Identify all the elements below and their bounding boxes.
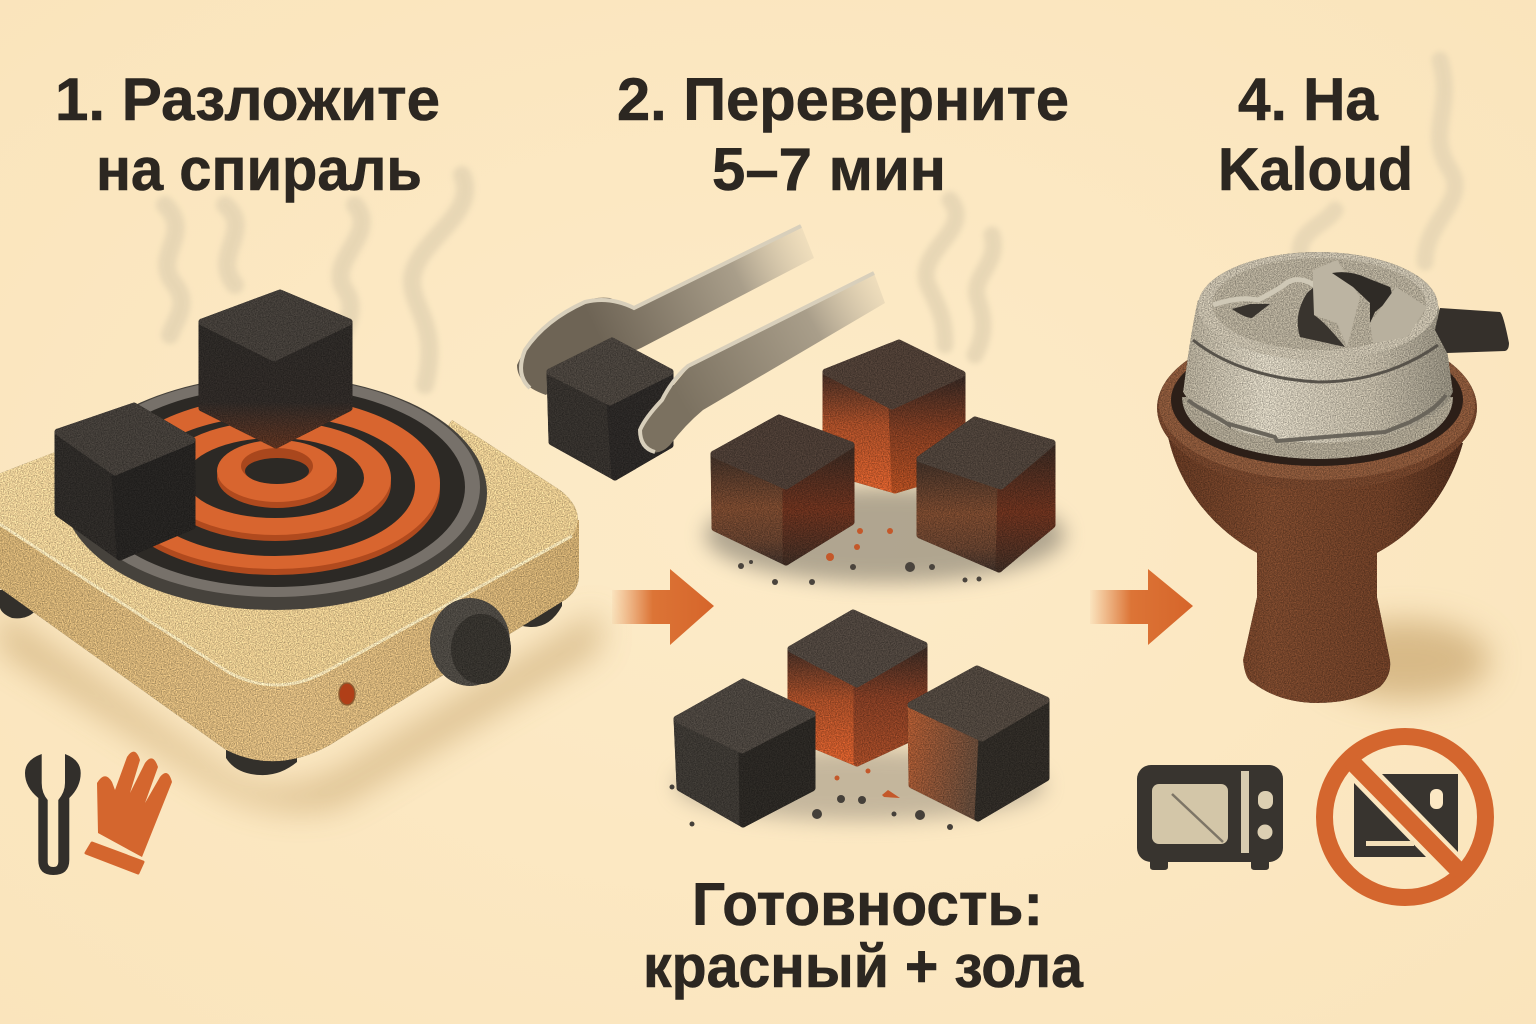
illustration: turning with tongs [517,200,1065,585]
heading: step 4: Kaloud [1218,136,1413,203]
illustration: hot plate [0,293,600,810]
heating coil [63,376,487,610]
ash shadow [705,487,1065,583]
right coal [911,669,1046,818]
back coal [826,343,962,490]
heading: step 4 [1218,66,1413,203]
left coal [714,418,851,562]
indicator light [339,683,355,705]
bowl shadow [1320,620,1490,700]
icon: microwave [1137,765,1283,870]
kaloud handle [1435,308,1509,353]
bowl inner groove [1171,334,1463,466]
caption: readiness [643,871,1084,1000]
coal cube on left [58,406,192,557]
hot plate shadow [0,610,600,810]
inner spiral ring [217,440,337,508]
tongs upper arm [517,225,814,395]
caption: readiness: Готовность: [692,871,1043,938]
held coal cube [550,341,670,477]
icon: prohibited microwave [1324,736,1486,898]
middle spiral ring [159,421,391,541]
heading: step 4: 4. На [1238,66,1379,133]
heading: step 2 [617,66,1069,203]
caption: readiness: красный + зола [643,933,1084,1000]
hot plate body [0,420,579,761]
heading: step 1 [55,66,440,203]
smoke over kaloud [1300,60,1455,262]
heading: step 2: 2. Переверните [617,66,1069,133]
hot plate feet [0,575,562,775]
coal cube on top [202,293,349,445]
clay bowl [1157,326,1477,703]
heading: step 1: на спираль [96,136,422,203]
heading: step 1: 1. Разложите [55,66,440,133]
icon: tongs [25,754,81,875]
back red coal [791,613,924,763]
illustration: ready coals [670,613,1046,830]
right coal [920,420,1052,569]
ash crumbs [738,560,982,585]
arrow: step 1 to 2 [612,569,714,645]
left black coal [677,682,812,824]
kaloud grooves [1188,340,1446,441]
smoke over stove [165,175,465,385]
control knob [430,598,511,686]
smoke over coals [926,200,993,355]
heading: step 2: 5–7 мин [712,136,946,203]
illustration: kaloud on bowl [1157,60,1509,703]
crumbs [670,784,953,830]
icon: glove [86,752,172,873]
kaloud vents [1213,260,1427,347]
kaloud lotus body [1182,252,1453,459]
outer spiral ring [110,397,440,575]
tongs lower arm [640,273,885,452]
ash shadow [675,749,1045,821]
arrow: step 2 to 4 [1090,569,1193,645]
